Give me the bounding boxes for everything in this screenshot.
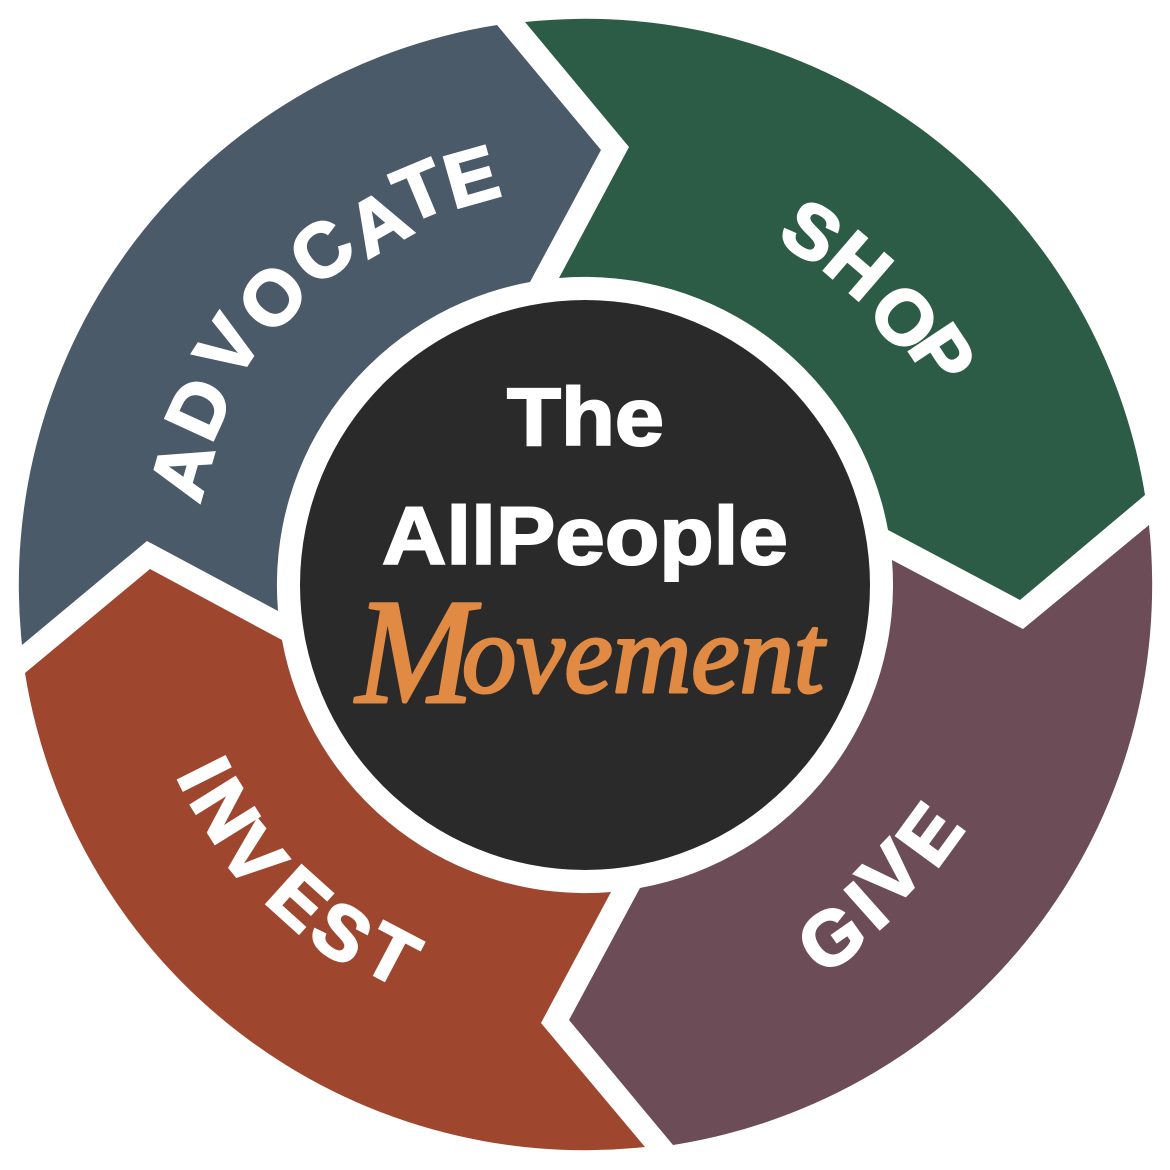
give shape	[569, 525, 1152, 1145]
panel: center circle	[300, 300, 870, 870]
heading: The: The	[507, 372, 664, 463]
heading: Movement: M	[354, 569, 481, 735]
label: INVEST	[161, 745, 432, 1004]
label: ADVOCATE: V	[179, 302, 278, 392]
label: ADVOCATE: D	[150, 366, 250, 452]
label: INVEST: N	[174, 765, 275, 857]
label: INVEST: T	[351, 907, 432, 1004]
label: ADVOCATE: E	[435, 130, 508, 225]
label: SHOP: S	[766, 183, 856, 282]
label: GIVE: G	[783, 887, 881, 990]
label: GIVE: E	[881, 789, 980, 881]
label: ADVOCATE	[135, 130, 508, 509]
label: GIVE: V	[843, 826, 939, 922]
label: GIVE: I	[831, 868, 903, 945]
heading: AllPeople: AllPeople	[382, 491, 788, 582]
label: INVEST: V	[204, 809, 302, 903]
panel: give segment	[569, 525, 1152, 1145]
label: SHOP: O	[852, 268, 955, 368]
label: SHOP: P	[892, 310, 991, 400]
label: ADVOCATE: O	[222, 248, 325, 349]
label: INVEST: I	[161, 745, 246, 802]
label: ADVOCATE: C	[274, 201, 370, 302]
label: SHOP: H	[809, 216, 907, 316]
label: INVEST: S	[296, 884, 386, 983]
label: SHOP	[766, 183, 991, 400]
advocate shape	[19, 25, 601, 645]
shop shape	[525, 19, 1145, 600]
heading: Movement: ovement	[462, 593, 827, 717]
invest shape	[25, 569, 645, 1150]
center disc	[300, 300, 870, 870]
label: ADVOCATE: T	[382, 144, 458, 240]
label: ADVOCATE: A	[334, 173, 424, 274]
panel: shop segment	[525, 19, 1145, 600]
heading: Movement	[354, 569, 827, 735]
label: ADVOCATE: A	[135, 432, 231, 509]
panel: advocate segment	[19, 25, 601, 645]
label: GIVE	[783, 789, 980, 990]
panel: invest segment	[25, 569, 645, 1150]
label: INVEST: E	[251, 851, 346, 948]
